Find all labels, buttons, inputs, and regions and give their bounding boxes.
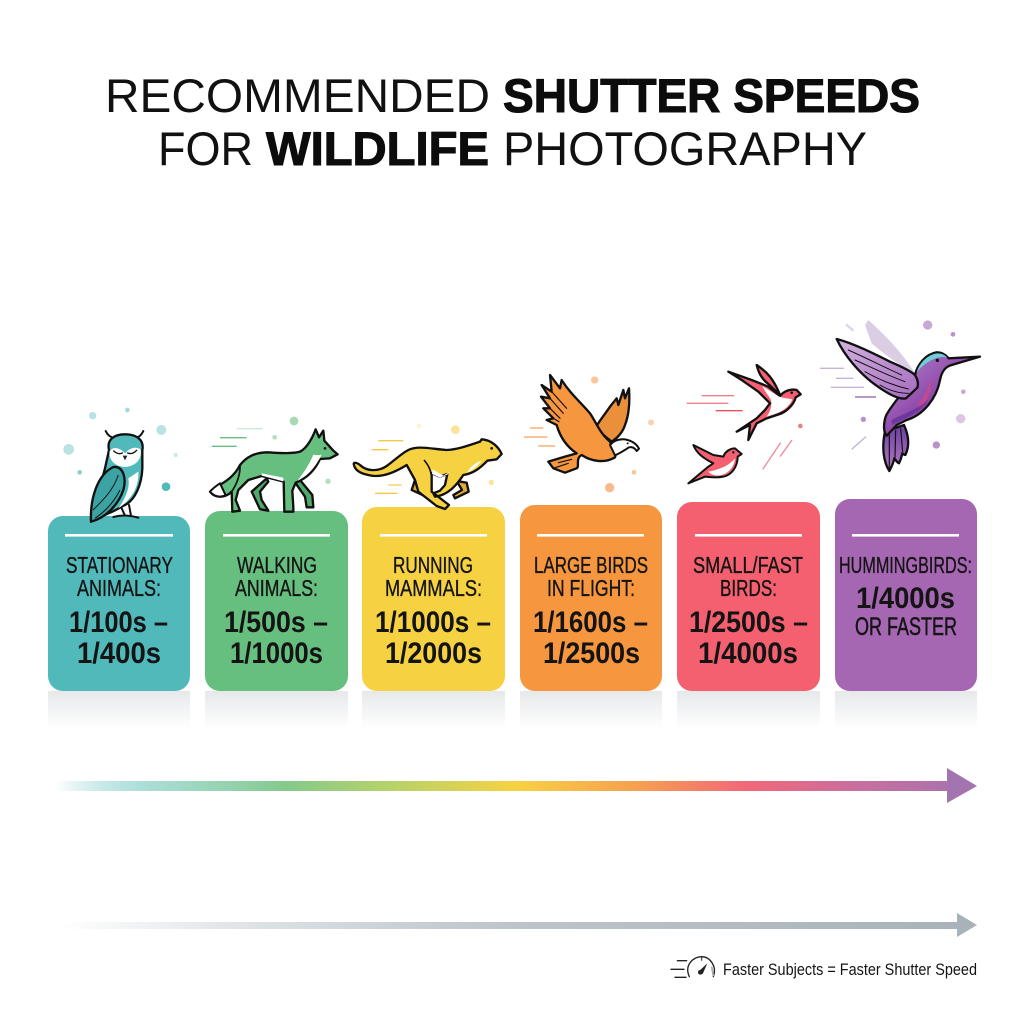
panel: running mammals: 1/1000s – — [375, 606, 491, 639]
panel: hummingbirds — [835, 499, 977, 691]
panel: large birds in flight: IN FLIGHT: — [547, 575, 635, 601]
icon: speedometer — [671, 957, 714, 977]
title — [105, 69, 920, 175]
grey arrow — [60, 913, 977, 937]
panel: large birds in flight: 1/1600s – — [533, 606, 648, 639]
panel: walking animals: WALKING — [237, 552, 317, 578]
panel: hummingbirds: 1/4000s — [856, 582, 955, 615]
panel: walking animals: 1/500s – — [224, 606, 328, 639]
icon: walking fox — [210, 417, 338, 512]
panel: stationary animals: 1/400s — [77, 637, 161, 670]
panel: hummingbirds: HUMMINGBIRDS: — [839, 552, 972, 578]
panel: running mammals — [362, 507, 505, 691]
panel: large birds in flight: 1/2500s — [543, 637, 640, 670]
footer note: Faster Subjects = Faster Shutter Speed — [723, 960, 977, 979]
title: SHUTTER SPEEDS — [503, 69, 920, 122]
panel: running mammals: 1/2000s — [385, 637, 482, 670]
panel: hummingbirds: OR FASTER — [855, 613, 957, 641]
panel: small fast birds — [677, 502, 820, 691]
speed gradient arrow — [55, 768, 977, 803]
panel: stationary animals — [48, 516, 190, 691]
panel: small fast birds: 1/4000s — [698, 637, 798, 670]
panel: running mammals: RUNNING — [393, 552, 473, 578]
icon: flying eagle — [524, 375, 654, 492]
title: FOR — [158, 122, 253, 175]
title: PHOTOGRAPHY — [503, 122, 867, 175]
panel: stationary animals: 1/100s – — [69, 606, 168, 639]
panel: walking animals: ANIMALS: — [235, 575, 318, 601]
panel: large birds in flight — [520, 505, 662, 691]
title: WILDLIFE — [266, 122, 489, 175]
panel: walking animals — [205, 511, 348, 691]
card shadows — [48, 691, 977, 729]
icon: small fast birds — [687, 365, 803, 483]
icon: hummingbird — [820, 320, 980, 471]
icon: owl — [63, 408, 178, 522]
panel: small fast birds: BIRDS: — [720, 575, 777, 601]
title: RECOMMENDED — [105, 69, 490, 122]
panel: small fast birds: 1/2500s – — [689, 606, 808, 639]
panel: running mammals: MAMMALS: — [385, 575, 482, 601]
panel: walking animals: 1/1000s — [230, 637, 323, 670]
panel: large birds in flight: LARGE BIRDS — [534, 552, 648, 578]
panel: stationary animals: ANIMALS: — [77, 575, 161, 601]
panel: stationary animals: STATIONARY — [66, 552, 173, 578]
panel: small fast birds: SMALL/FAST — [693, 552, 803, 578]
icon: running cheetah — [354, 424, 502, 509]
